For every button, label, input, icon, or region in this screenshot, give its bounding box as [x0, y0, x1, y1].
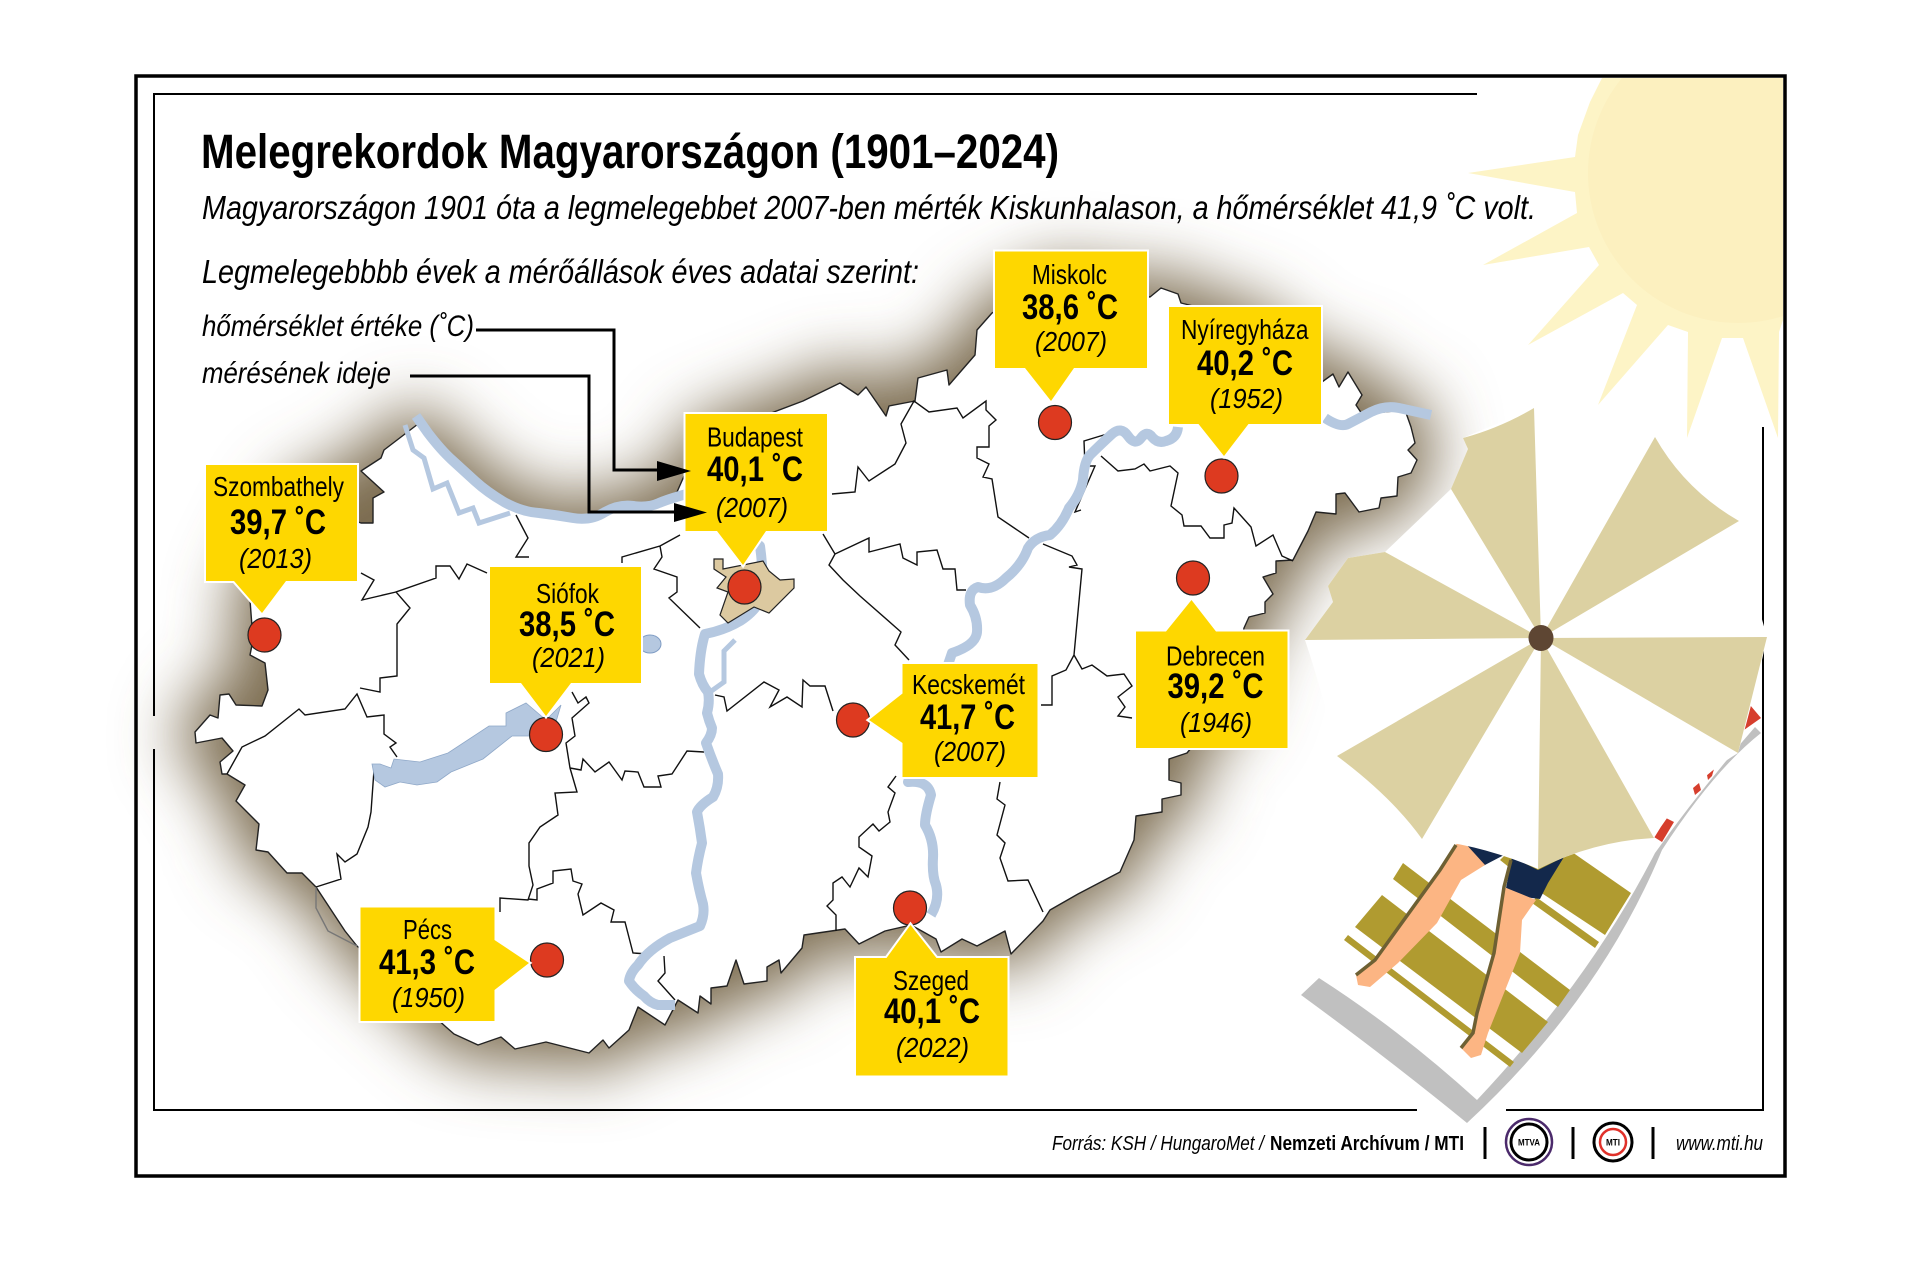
callout: Siófok: (2021): [532, 642, 605, 673]
Lake Velence: [639, 635, 661, 653]
footer dividers: [1484, 1127, 1654, 1159]
umbrella panels: [1305, 408, 1767, 869]
arrow: time of measurement: [410, 376, 707, 522]
arrow: temperature value: [476, 330, 691, 481]
callout: Debrecen: 39,2 ˚C: [1168, 667, 1264, 706]
umbrella canopy: [1305, 408, 1767, 869]
callout: Szombathely: 39,7 ˚C: [230, 503, 326, 542]
callout: Debrecen: (1946): [1180, 707, 1252, 738]
callout: Debrecen: [1136, 600, 1288, 748]
beach towel and sunbather: [1301, 705, 1761, 1123]
county borders: [227, 401, 1293, 1000]
frame: [136, 76, 1785, 1176]
Danube river: [416, 416, 763, 1005]
Lake Balaton: [372, 703, 561, 787]
legs: [1356, 843, 1536, 1058]
callout: Budapest: [686, 414, 827, 565]
callout: Pécs: [360, 908, 529, 1021]
callout: Siófok: 38,5 ˚C: [519, 605, 615, 644]
callout: Nyíregyháza: Nyíregyháza: [1181, 314, 1309, 345]
upper Tisza river: [1325, 407, 1431, 425]
callout: Pécs: (1950): [392, 982, 465, 1013]
towel stripes: [1344, 850, 1631, 1067]
red towel marks: [1654, 705, 1761, 842]
map shadow: [195, 280, 1417, 1053]
umbrella hub: [1528, 625, 1554, 651]
callout: Kecskemét: (2007): [934, 736, 1006, 767]
Tisza river: [908, 427, 1178, 915]
legend: time of measurement: mérésének ideje: [202, 357, 391, 390]
callout: Pécs: Pécs: [403, 914, 452, 945]
umbrella: [1305, 408, 1767, 869]
logo: MTVA: MTVA: [1518, 1138, 1540, 1148]
Szigetköz side arm: [405, 425, 510, 523]
border line to Croatia: [316, 887, 357, 946]
callout: Siófok: Siófok: [536, 578, 600, 609]
callout: Kecskemét: 41,7 ˚C: [920, 698, 1015, 737]
callout: Miskolc: 38,6 ˚C: [1022, 288, 1118, 327]
shorts: [1467, 845, 1564, 899]
callout: Szeged: 40,1 ˚C: [884, 992, 980, 1031]
callout: Szombathely: [206, 465, 357, 613]
callout: Szeged: [856, 925, 1008, 1076]
callout: Siófok: [490, 567, 641, 716]
callout: Debrecen: Debrecen: [1166, 640, 1265, 672]
callout: Kecskemét: Kecskemét: [912, 669, 1025, 700]
logo: MTI: [1594, 1123, 1632, 1161]
callout: Miskolc: (2007): [1035, 326, 1107, 357]
footer source bold: Nemzeti Archívum / MTI: [1270, 1133, 1464, 1155]
callout: Szombathely: Szombathely: [213, 471, 344, 502]
footer source: Forrás: KSH / HungaroMet /: [1052, 1133, 1266, 1155]
callout: Nyíregyháza: [1169, 307, 1321, 456]
callout: Budapest: 40,1 ˚C: [707, 450, 803, 489]
lounger frame: [1301, 727, 1761, 1123]
Budapest area: [714, 559, 794, 623]
logo: MTVA: [1506, 1119, 1552, 1165]
subtitle: Magyarországon 1901 óta a legmelegebbet 2007-ben mérték Kiskunhalason, a hőmérséklet 41,9 ˚C volt.: [202, 189, 1536, 226]
chart subheading: Legmelegebbbb évek a mérőállások éves adatai szerint:: [202, 253, 919, 290]
callout: Szeged: (2022): [896, 1032, 969, 1063]
title: Melegrekordok Magyarországon (1901–2024): [201, 126, 1059, 179]
legend: temperature value: hőmérséklet értéke (˚C): [202, 310, 474, 343]
city markers: [248, 406, 1238, 977]
logo: MTI: MTI: [1606, 1138, 1620, 1148]
website: www.mti.hu: [1676, 1133, 1763, 1155]
callout: Budapest: Budapest: [707, 422, 803, 452]
callout: Nyíregyháza: 40,2 ˚C: [1197, 344, 1293, 383]
callout: Pécs: 41,3 ˚C: [379, 943, 475, 982]
callout: Nyíregyháza: (1952): [1210, 383, 1283, 414]
callout: Budapest: (2007): [716, 492, 788, 523]
callout: Kecskemét: [869, 664, 1038, 777]
callout: Miskolc: [995, 252, 1147, 401]
callout: Szeged: Szeged: [893, 965, 969, 996]
callout: Miskolc: Miskolc: [1032, 259, 1107, 290]
sun: [1468, 78, 1783, 438]
Csepel side arm: [710, 640, 735, 692]
country outline: [195, 280, 1417, 1053]
map of Hungary: [195, 280, 1431, 1053]
callout: Szombathely: (2013): [239, 543, 312, 574]
